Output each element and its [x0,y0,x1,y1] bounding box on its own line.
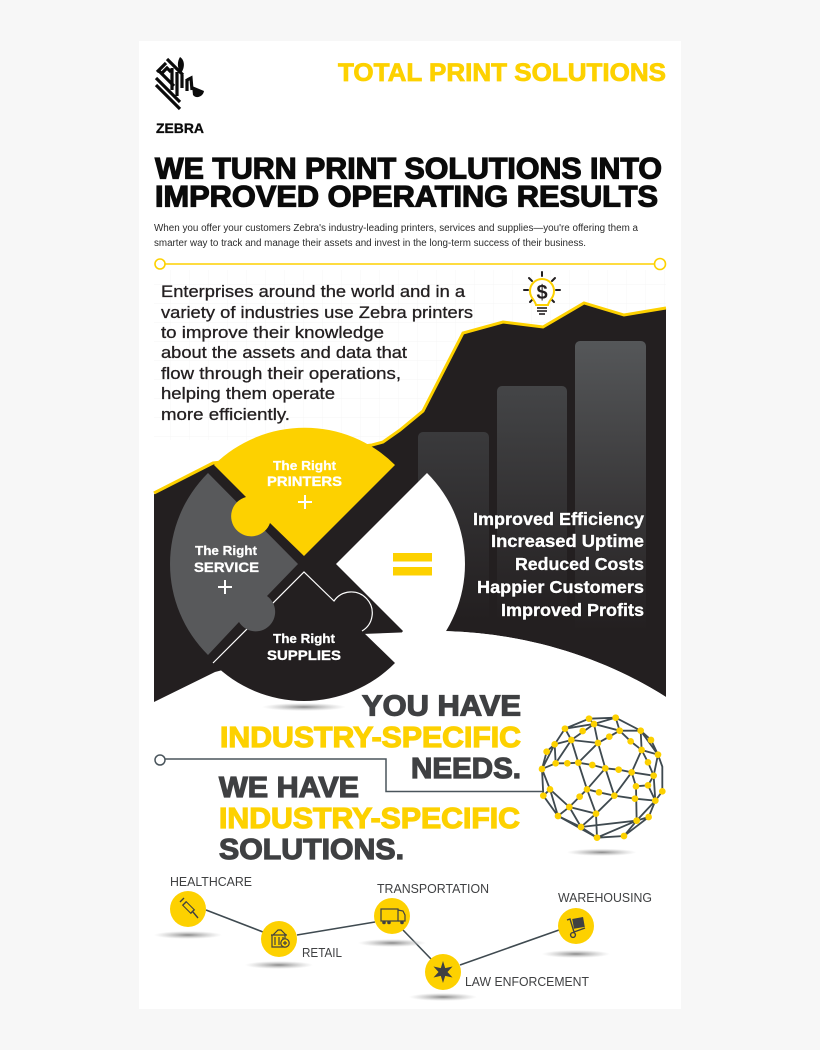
industry: healthcare: HEALTHCARE [170,875,252,889]
connector line [155,755,544,792]
intro paragraph: flow through their operations, [161,365,401,383]
results list: Happier Customers [477,577,644,597]
logo wordmark: ZEBRA [156,121,204,136]
results list: Improved Efficiency [473,509,644,529]
intro text [154,223,638,249]
icon: dollar lightbulb [524,272,560,314]
industry: healthcare [154,875,252,939]
heading: we have: SOLUTIONS. [219,834,404,866]
results list: Reduced Costs [515,554,644,574]
title: WE TURN PRINT SOLUTIONS INTO [155,152,662,186]
industry: transportation: TRANSPORTATION [377,882,489,896]
results list [473,509,644,620]
heading: we have: INDUSTRY-SPECIFIC [219,803,520,835]
heading: you have: YOU HAVE [362,690,521,722]
background grid [154,270,666,440]
puzzle piece: service [170,473,298,655]
heading: we have: WE HAVE [219,772,359,804]
bar chart [418,341,646,630]
page card [139,41,681,1009]
puzzle piece: printers [214,428,395,556]
heading: you have: NEEDS. [411,753,521,785]
intro paragraph: helping them operate [161,385,335,403]
puzzle piece: supplies [213,572,395,701]
puzzle piece: supplies: The Right [273,632,336,646]
chart outline [154,303,666,493]
intro paragraph: to improve their knowledge [161,324,384,342]
heading: you have [220,690,521,785]
intro paragraph: about the assets and data that [161,344,407,362]
intro paragraph: Enterprises around the world and in a [161,283,466,301]
divider with end circles [155,258,666,270]
industry: retail [245,921,342,969]
title [155,152,662,214]
title: IMPROVED OPERATING RESULTS [155,180,658,214]
results list: Improved Profits [501,600,644,620]
industry: retail: RETAIL [302,946,342,960]
intro paragraph: more efficiently. [161,406,290,424]
industry connector lines [206,910,559,965]
intro text: When you offer your customers Zebra's industry-leading printers, services and supplies—you're offering them a [154,223,638,234]
benefit: equals piece [336,473,465,655]
icon: network globe [539,714,666,856]
puzzle piece: service: SERVICE [194,559,259,575]
icon: Zebra logo [156,57,204,109]
industry: law enforcement [409,954,589,1001]
intro paragraph [161,283,473,424]
shadow under puzzle [262,703,346,711]
puzzle piece: printers: PRINTERS [267,473,342,489]
industry: transportation [358,882,489,947]
puzzle piece: supplies: SUPPLIES [267,647,341,663]
heading: we have [219,772,520,866]
section label: TOTAL PRINT SOLUTIONS [338,59,666,87]
intro paragraph: variety of industries use Zebra printers [161,304,473,322]
industry: warehousing: WAREHOUSING [558,891,652,905]
industry: warehousing [542,891,652,958]
puzzle piece: service: The Right [195,544,258,558]
puzzle piece: printers: The Right [273,459,337,473]
icon: dollar lightbulb: $ [536,282,548,304]
panel: dark area chart [154,303,666,702]
industry: law enforcement: LAW ENFORCEMENT [465,975,589,989]
intro text: smarter way to track and manage their assets and invest in the long-term success of their business. [154,238,586,249]
white lower area [340,631,666,712]
heading: you have: INDUSTRY-SPECIFIC [220,722,521,754]
results list: Increased Uptime [491,531,644,551]
